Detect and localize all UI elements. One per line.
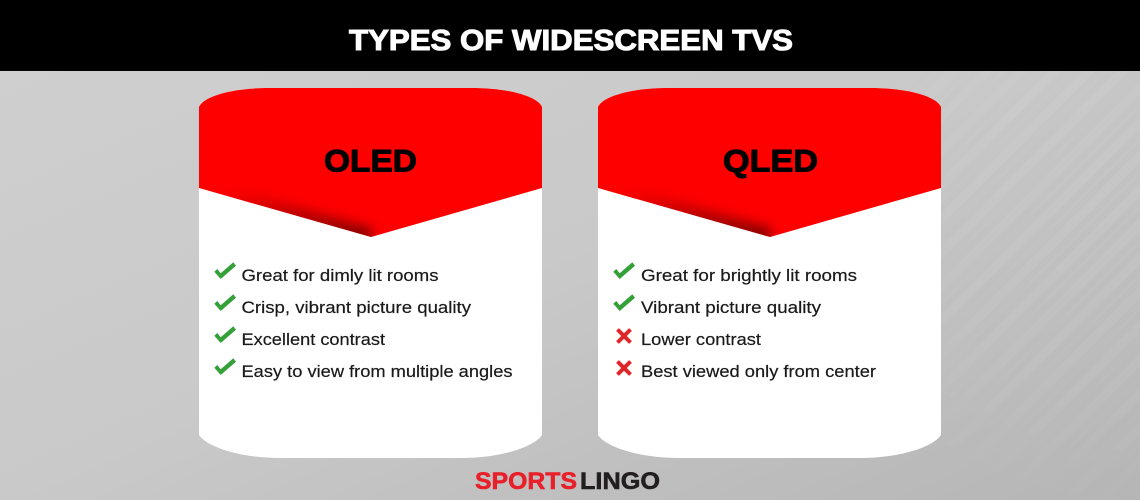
OLED header [199,88,542,237]
logo: SportsLingo [475,468,660,495]
card body [199,88,542,458]
OLED heading: OLED [324,142,417,178]
item text: Great for dimly lit rooms [242,266,438,285]
card body [598,88,941,458]
icon: cross [618,330,630,342]
icon: check [214,262,236,279]
icon: cross [618,362,630,374]
logo: SportsLingo: LINGO [580,468,660,495]
QLED header [598,88,941,237]
panel: QLED [598,88,941,458]
item text: Excellent contrast [242,330,385,349]
OLED list [214,262,513,381]
icon: check [214,294,236,311]
title: TYPES OF WIDESCREEN TVS [349,25,793,57]
QLED list [613,262,876,381]
icon: check [214,358,236,375]
icon: check [613,294,635,311]
item text: Best viewed only from center [641,362,876,381]
item text: Easy to view from multiple angles [242,362,512,381]
icon: check [214,326,236,343]
background [518,232,1140,500]
QLED heading: QLED [723,142,818,178]
logo: SportsLingo: SPORTS [475,468,577,495]
item text: Lower contrast [641,330,761,349]
item text: Great for brightly lit rooms [641,266,857,285]
icon: check [613,262,635,279]
item text: Crisp, vibrant picture quality [242,298,472,317]
item text: Vibrant picture quality [641,298,822,317]
panel: OLED [199,88,542,458]
title banner [0,0,1140,71]
